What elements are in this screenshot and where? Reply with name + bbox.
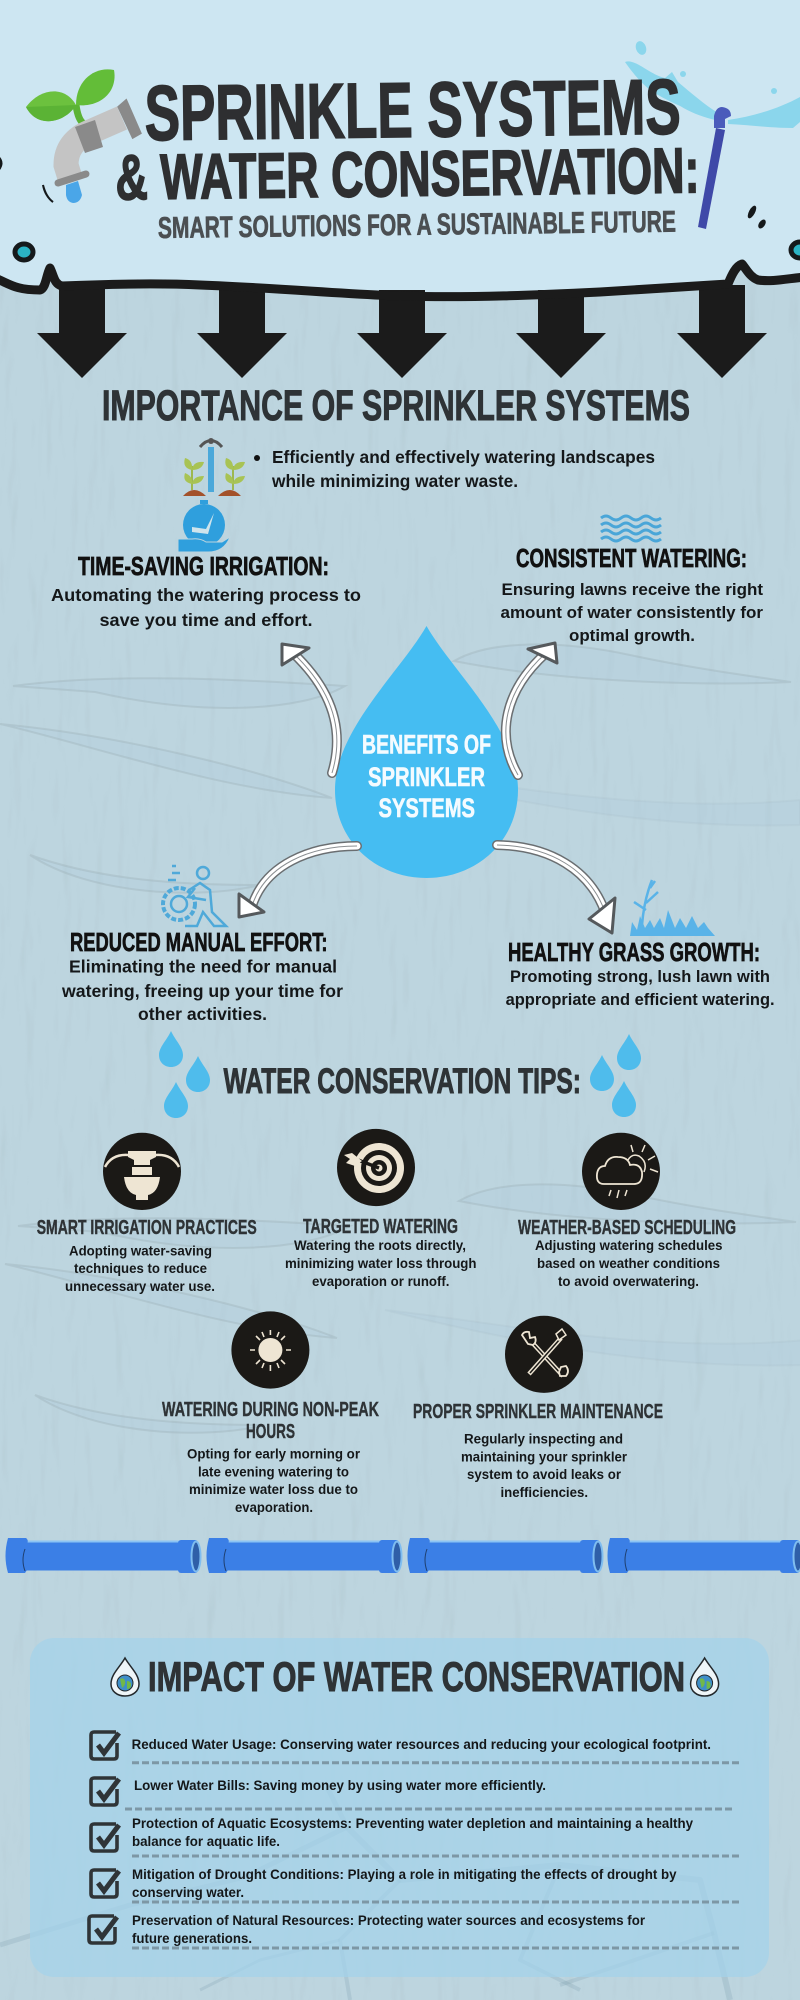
- benefit: time-saving irrigation: TIME-SAVING IRRIGATION:: [78, 551, 329, 581]
- arrow: top-left: [282, 644, 337, 773]
- tip: watering during non-peak hours: [162, 1399, 379, 1515]
- benefit: reduced manual effort: [61, 927, 343, 1024]
- tip: targeted watering: [285, 1216, 476, 1289]
- blue pipes row: [6, 1538, 800, 1573]
- tip: proper sprinkler maintenance: system to avoid leaks or: [467, 1467, 622, 1482]
- icon: sprinkler jet: [625, 40, 800, 229]
- impact list text: Reduced Water Usage: Conserving water resources and reducing your ecological footprint.: [132, 1737, 711, 1752]
- icon: sprinkler fountain: [103, 1133, 181, 1210]
- impact list text: Protection of Aquatic Ecosystems: Preventing water depletion and maintaining a healthy: [132, 1816, 693, 1831]
- tip: proper sprinkler maintenance: [413, 1401, 663, 1500]
- benefit: healthy grass growth: Promoting strong, lush lawn with: [510, 968, 770, 986]
- icon: sun: [231, 1311, 309, 1389]
- icon: sprinkler with plants: [183, 438, 245, 496]
- impact list text: Mitigation of Drought Conditions: Playing a role in mitigating the effects of drought by: [132, 1867, 677, 1882]
- benefit: consistent watering: optimal growth.: [569, 627, 695, 645]
- heading: conservation tips: WATER CONSERVATION TIPS:: [224, 1062, 581, 1101]
- tip: watering during non-peak hours: late evening watering to: [198, 1464, 349, 1479]
- tip: proper sprinkler maintenance: Regularly inspecting and: [464, 1432, 623, 1447]
- icon: tap with sprout: [26, 69, 140, 203]
- benefit: time-saving irrigation: save you time and effort.: [100, 610, 312, 630]
- bullet text: while minimizing water waste.: [271, 471, 518, 491]
- tip: smart irrigation practices: unnecessary water use.: [65, 1279, 215, 1294]
- tip: targeted watering: minimizing water loss through: [285, 1256, 476, 1271]
- tip: watering during non-peak hours: HOURS: [246, 1421, 295, 1443]
- tip: proper sprinkler maintenance: maintaining your sprinkler: [461, 1449, 628, 1464]
- title: [114, 62, 700, 213]
- arrow: top-right: [506, 643, 557, 775]
- arrows down row: [37, 285, 767, 378]
- benefit: consistent watering: Ensuring lawns receive the right: [502, 581, 764, 599]
- header decor dots: [0, 157, 800, 260]
- benefit: consistent watering: [500, 543, 764, 645]
- checkboxes: [89, 1732, 119, 1943]
- tip: smart irrigation practices: [37, 1217, 257, 1294]
- arrow: bottom-right: [497, 845, 615, 933]
- tip: targeted watering: Watering the roots directly,: [294, 1238, 466, 1253]
- benefit: healthy grass growth: appropriate and efficient watering.: [506, 991, 775, 1009]
- faded background swooshes: [0, 644, 800, 1433]
- panel: impact of water conservation: [30, 1638, 769, 1977]
- background cracks: [0, 1787, 730, 2000]
- icon: globe drop right: [691, 1658, 719, 1696]
- central water drop: SYSTEMS: [378, 793, 475, 823]
- benefit: time-saving irrigation: Automating the watering process to: [51, 585, 361, 605]
- bullet text: [254, 447, 655, 491]
- water drops left: [159, 1031, 210, 1118]
- central water drop: [335, 626, 518, 878]
- arrow: bottom-left: [239, 846, 357, 917]
- icon: stopwatch on hand: [178, 500, 230, 552]
- icon: globe drop left: [111, 1658, 139, 1696]
- benefit: reduced manual effort: watering, freeing up your time for: [61, 981, 343, 1001]
- benefit: reduced manual effort: other activities.: [138, 1004, 267, 1024]
- tip: smart irrigation practices: techniques to reduce: [74, 1261, 207, 1276]
- header sky band: [0, 0, 800, 297]
- impact list text: future generations.: [132, 1931, 252, 1946]
- benefit: consistent watering: amount of water consistently for: [500, 604, 764, 622]
- central water drop: BENEFITS OF: [362, 730, 491, 760]
- tip: proper sprinkler maintenance: inefficiencies.: [500, 1485, 588, 1500]
- water drops right: [590, 1034, 641, 1117]
- impact list text: [132, 1737, 711, 1946]
- bullet text: Efficiently and effectively watering landscapes: [272, 447, 655, 467]
- tip: smart irrigation practices: SMART IRRIGATION PRACTICES: [37, 1217, 257, 1239]
- tip: targeted watering: TARGETED WATERING: [303, 1216, 458, 1238]
- tip: weather-based scheduling: Adjusting watering schedules: [535, 1238, 722, 1253]
- tip: proper sprinkler maintenance: PROPER SPRINKLER MAINTENANCE: [413, 1401, 663, 1423]
- impact list text: Preservation of Natural Resources: Protecting water sources and ecosystems for: [132, 1913, 646, 1928]
- tip: weather-based scheduling: based on weather conditions: [537, 1256, 720, 1271]
- benefit: reduced manual effort: REDUCED MANUAL EFFORT:: [70, 927, 328, 957]
- tip: weather-based scheduling: [518, 1217, 736, 1289]
- icon: tall grass: [630, 880, 715, 936]
- benefit: healthy grass growth: [506, 937, 775, 1009]
- icon: waves: [601, 516, 661, 541]
- impact list text: Lower Water Bills: Saving money by using water more efficiently.: [134, 1778, 546, 1793]
- impact list text: balance for aquatic life.: [132, 1834, 280, 1849]
- icon: worker pushing gear: [163, 866, 226, 926]
- impact list text: conserving water.: [132, 1885, 244, 1900]
- icon: target: [337, 1129, 415, 1206]
- tip: watering during non-peak hours: minimize water loss due to: [189, 1482, 358, 1497]
- tip: smart irrigation practices: Adopting water-saving: [69, 1243, 212, 1258]
- tip: targeted watering: evaporation or runoff.: [312, 1274, 450, 1289]
- dashed dividers: [125, 1763, 740, 1948]
- icon: wrench and screwdriver: [505, 1316, 583, 1393]
- benefit: time-saving irrigation: [51, 551, 361, 630]
- benefit: reduced manual effort: Eliminating the need for manual: [69, 957, 337, 977]
- tip: watering during non-peak hours: WATERING DURING NON-PEAK: [162, 1399, 379, 1421]
- tip: watering during non-peak hours: Opting for early morning or: [187, 1447, 361, 1462]
- tip: watering during non-peak hours: evaporation.: [235, 1500, 313, 1515]
- central water drop: SPRINKLER: [368, 762, 485, 792]
- wavy black divider: [0, 264, 800, 297]
- tip: weather-based scheduling: to avoid overwatering.: [558, 1274, 699, 1289]
- icon: cloud rain sun: [582, 1133, 660, 1210]
